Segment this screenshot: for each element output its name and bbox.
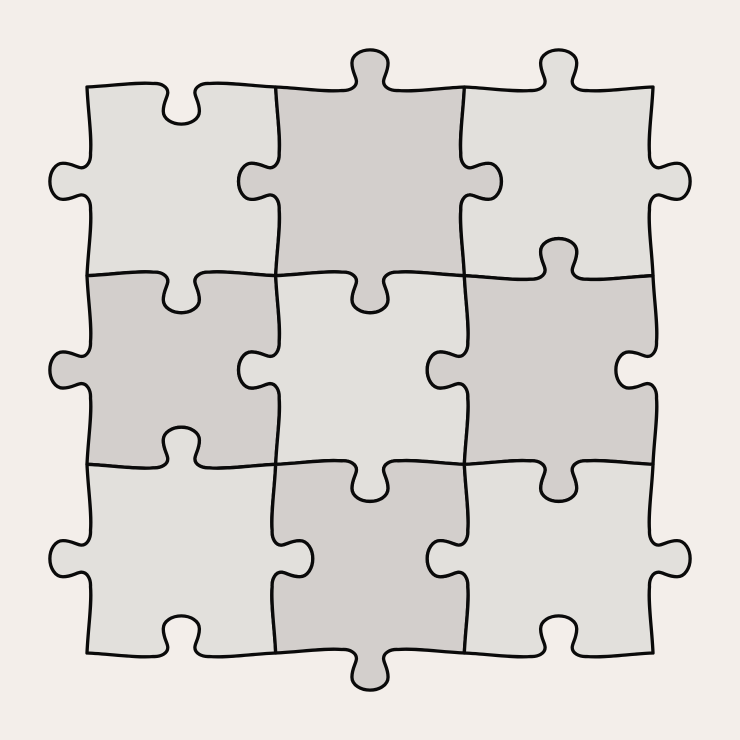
piece: row 3 column 2: [272, 460, 468, 690]
puzzle grid: [50, 50, 690, 690]
piece: row 2 column 1: [50, 272, 280, 468]
piece: row 2 column 3: [427, 239, 657, 501]
piece: row 1 column 2: [239, 50, 501, 313]
piece: row 3 column 3: [427, 460, 690, 657]
piece: row 3 column 1: [50, 427, 313, 657]
piece: row 2 column 2: [239, 272, 468, 501]
piece: row 1 column 1: [50, 83, 280, 313]
piece: row 1 column 3: [460, 50, 690, 280]
